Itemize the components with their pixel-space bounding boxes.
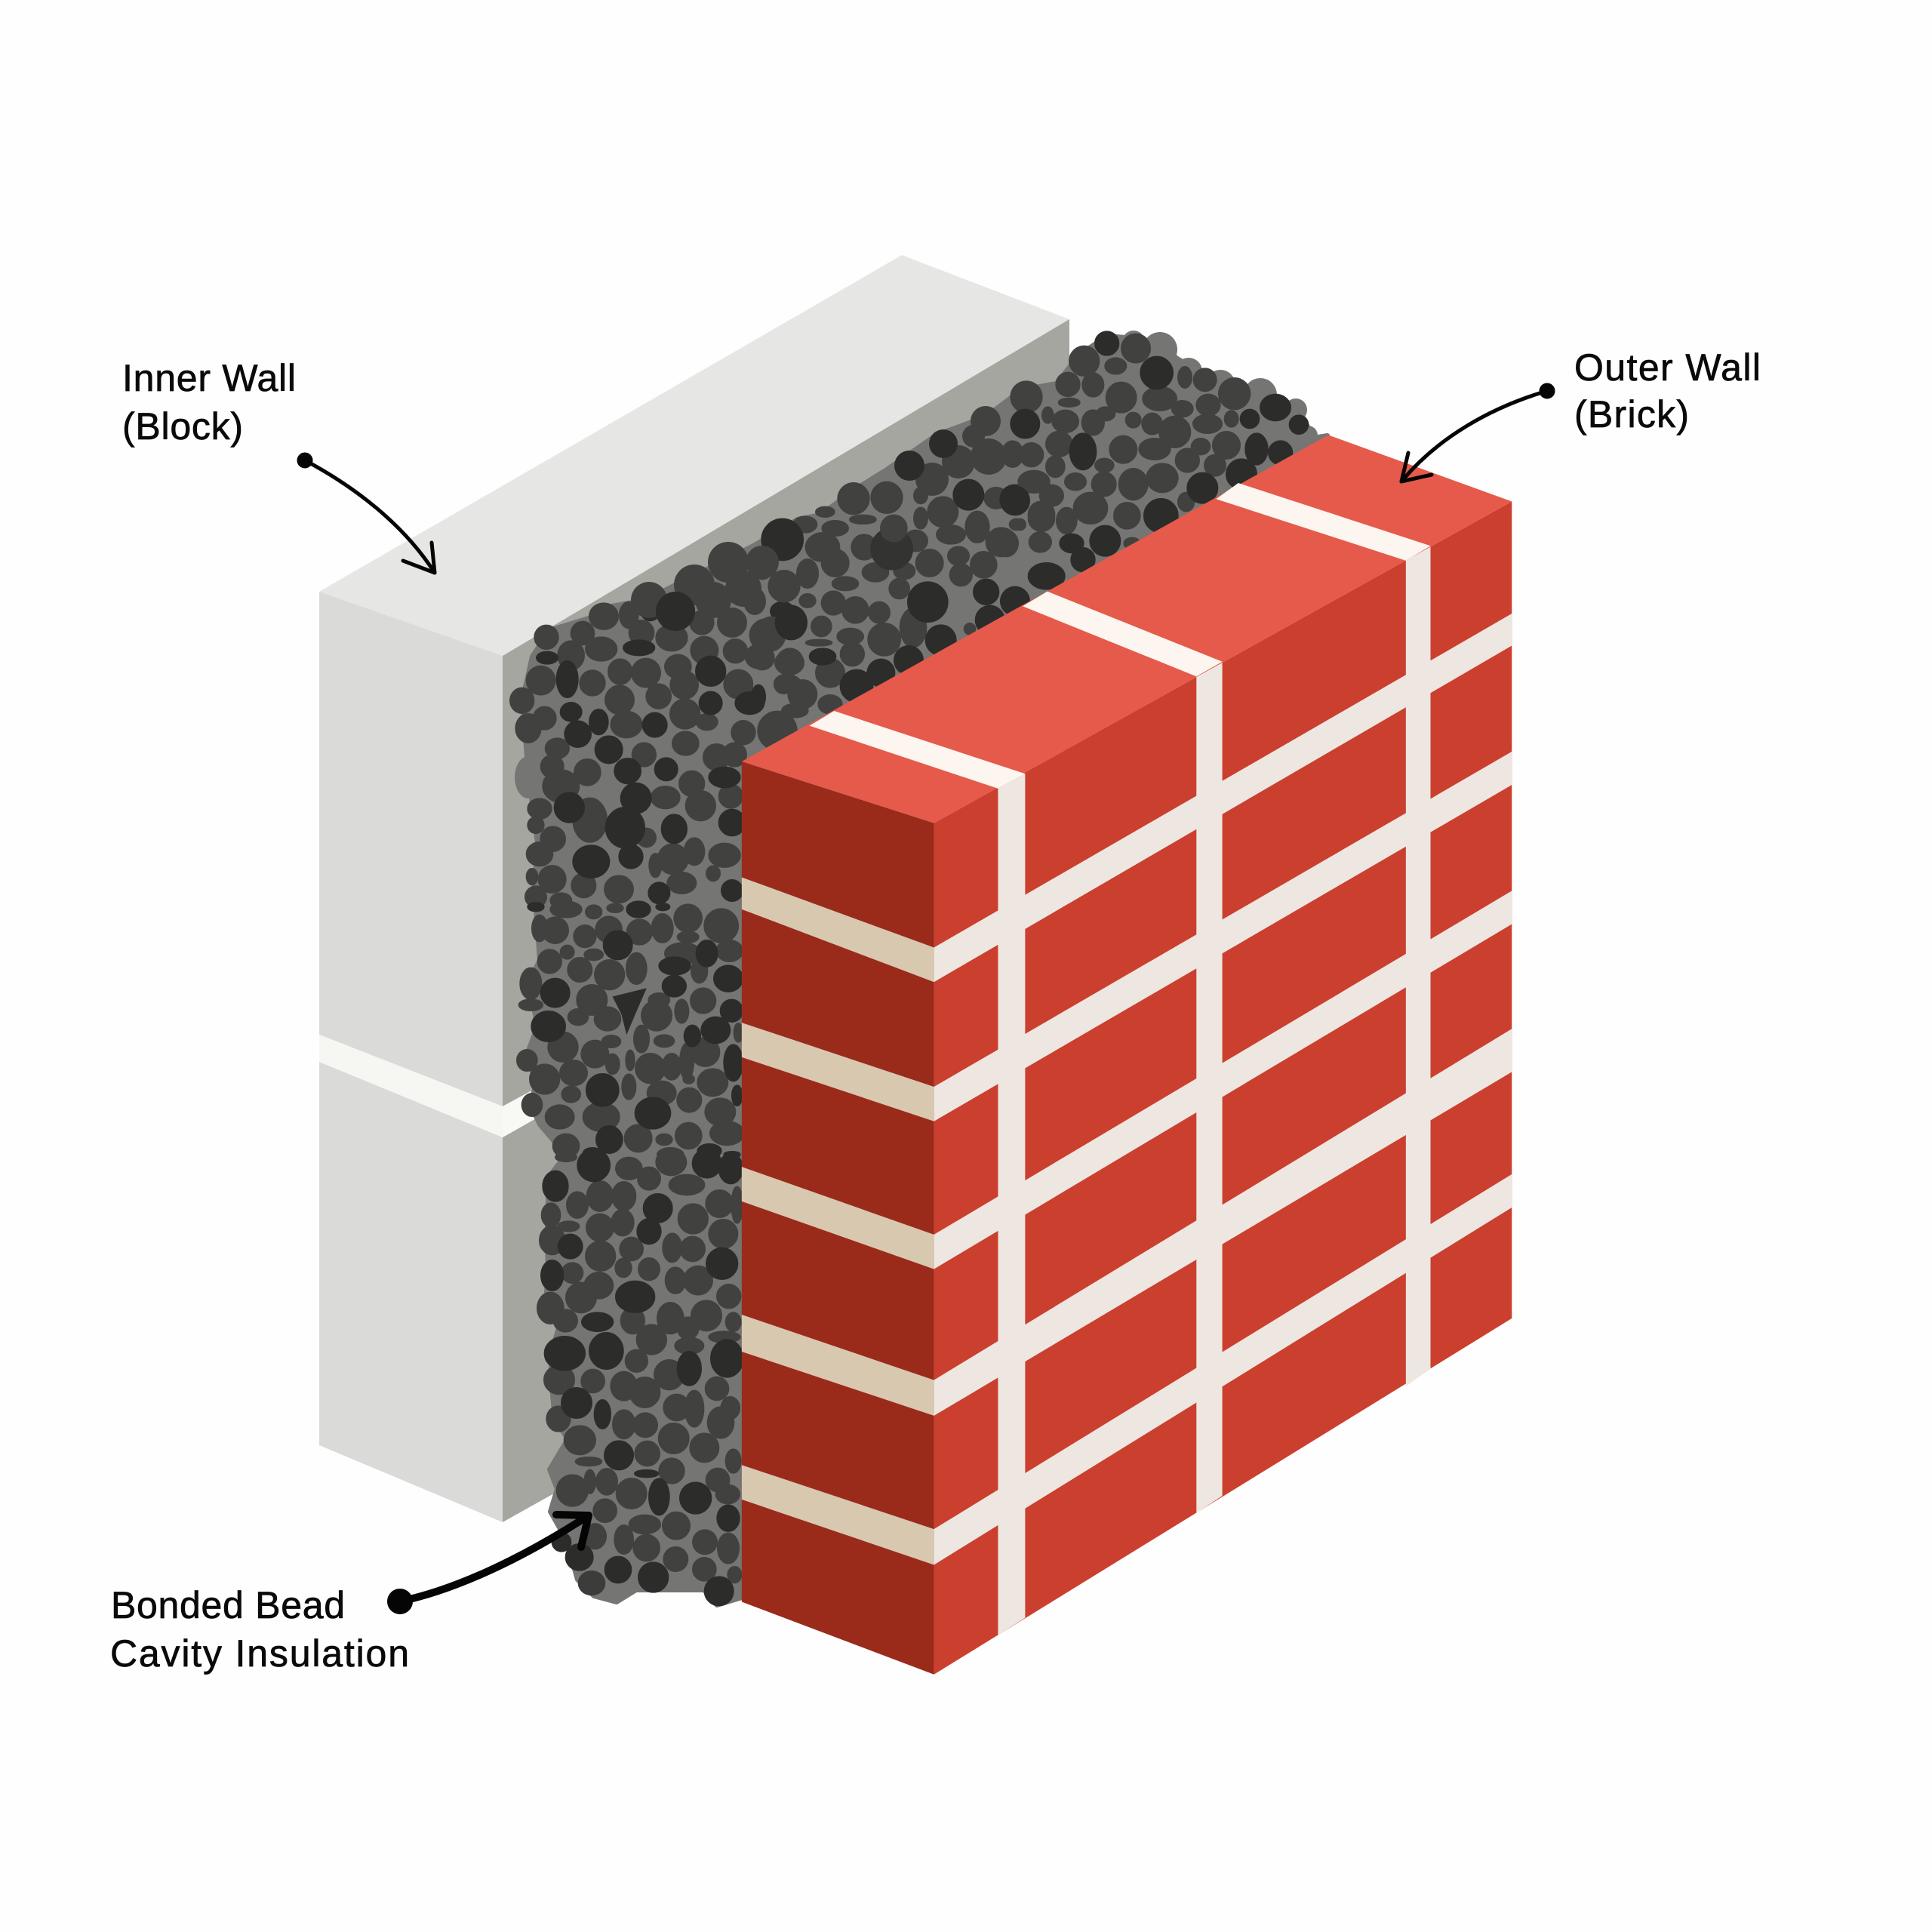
label: outer wall [1574, 346, 1761, 435]
panel: inner wall block [319, 255, 1069, 1522]
horizontal mortar joints [934, 546, 1512, 1635]
beads: middle-left cluster [518, 902, 743, 1161]
label: bonded bead cavity insulation: Bonded Bead [111, 1584, 345, 1626]
beads: upper-middle cluster [745, 480, 1057, 749]
label: bonded bead cavity insulation [110, 1584, 409, 1675]
label: inner wall [122, 357, 296, 448]
label: inner wall: Inner Wall [122, 357, 296, 399]
beads: lower-left cluster [538, 1149, 743, 1407]
beads: upper-right cluster [995, 332, 1308, 613]
beads: top-left cluster [511, 602, 802, 908]
beads: bottom cluster [547, 1389, 741, 1605]
label: bonded bead cavity insulation: Cavity Insulation [110, 1632, 409, 1675]
brick top face [742, 435, 1512, 823]
brick right face [934, 501, 1512, 1675]
label: outer wall: Outer Wall [1574, 346, 1761, 389]
arrow: outer wall [1401, 385, 1553, 481]
label: outer wall: (Brick) [1574, 393, 1689, 435]
panel: outer brick wall [742, 435, 1512, 1675]
panel: bonded bead insulation [511, 331, 1327, 1605]
beads: top edge fill [631, 406, 1007, 631]
top mortar strips [810, 483, 1431, 789]
label: inner wall: (Block) [122, 405, 243, 448]
brick left face [742, 761, 934, 1675]
left face mortar stripes [742, 877, 934, 1564]
arrow: bonded bead insulation [391, 1515, 589, 1611]
arrow: inner wall [299, 454, 435, 573]
